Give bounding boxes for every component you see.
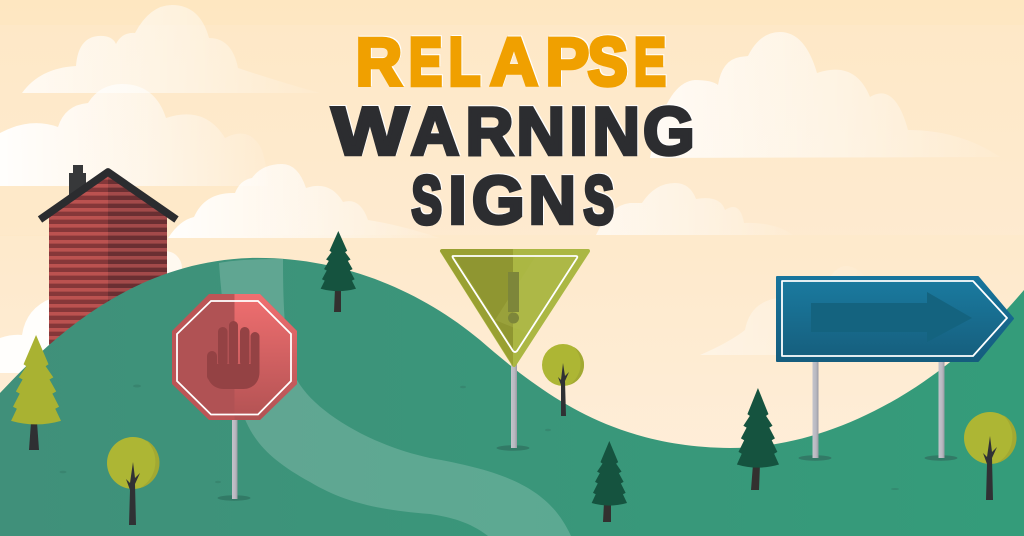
- tree: dark pine centre: [592, 441, 627, 522]
- heading: warning: A: [411, 94, 459, 170]
- title: [332, 24, 695, 238]
- grass tufts: [60, 384, 899, 490]
- house: [40, 165, 176, 345]
- heading: relapse: R: [356, 24, 402, 100]
- post: [496, 364, 530, 451]
- hill: [0, 258, 1024, 536]
- heading: relapse: S: [588, 24, 628, 100]
- tree: dark pine on hilltop: [321, 231, 356, 312]
- heading: relapse: A: [490, 24, 538, 100]
- tree: yellow-green pine: [11, 335, 61, 450]
- board: [777, 277, 1013, 361]
- chimney: [69, 165, 86, 207]
- heading: signs: G: [472, 162, 525, 238]
- heading: relapse: E: [409, 24, 442, 100]
- icon: hand: [207, 321, 260, 389]
- tree: dark pine right: [737, 388, 779, 490]
- heading: relapse: P: [545, 24, 589, 100]
- heading: signs: N: [528, 162, 576, 238]
- icon: arrow: [811, 292, 972, 342]
- icon: exclamation mark: [508, 272, 519, 324]
- triangle: [442, 251, 588, 365]
- tree: round right: [964, 412, 1017, 500]
- stop sign: [172, 294, 297, 501]
- road: [219, 259, 571, 536]
- octagon: [172, 294, 297, 420]
- tree: round centre: [542, 344, 584, 416]
- heading: signs: S: [411, 162, 442, 238]
- heading: warning: R: [465, 94, 513, 170]
- heading: warning: I: [569, 94, 588, 170]
- heading: warning: N: [516, 94, 565, 170]
- clouds: [0, 5, 1000, 373]
- heading: signs: I: [448, 162, 467, 238]
- tree: round left: [107, 437, 160, 525]
- heading: signs: S: [583, 162, 614, 238]
- direction sign: [777, 277, 1013, 461]
- roof: [40, 172, 176, 220]
- heading: warning: W: [332, 94, 409, 170]
- heading: relapse: E: [634, 24, 666, 100]
- heading: relapse: L: [449, 24, 480, 100]
- heading: warning: G: [643, 94, 695, 170]
- post: [218, 418, 250, 501]
- heading: warning: N: [592, 94, 640, 170]
- posts: [798, 360, 958, 461]
- yield warning sign: [440, 249, 588, 451]
